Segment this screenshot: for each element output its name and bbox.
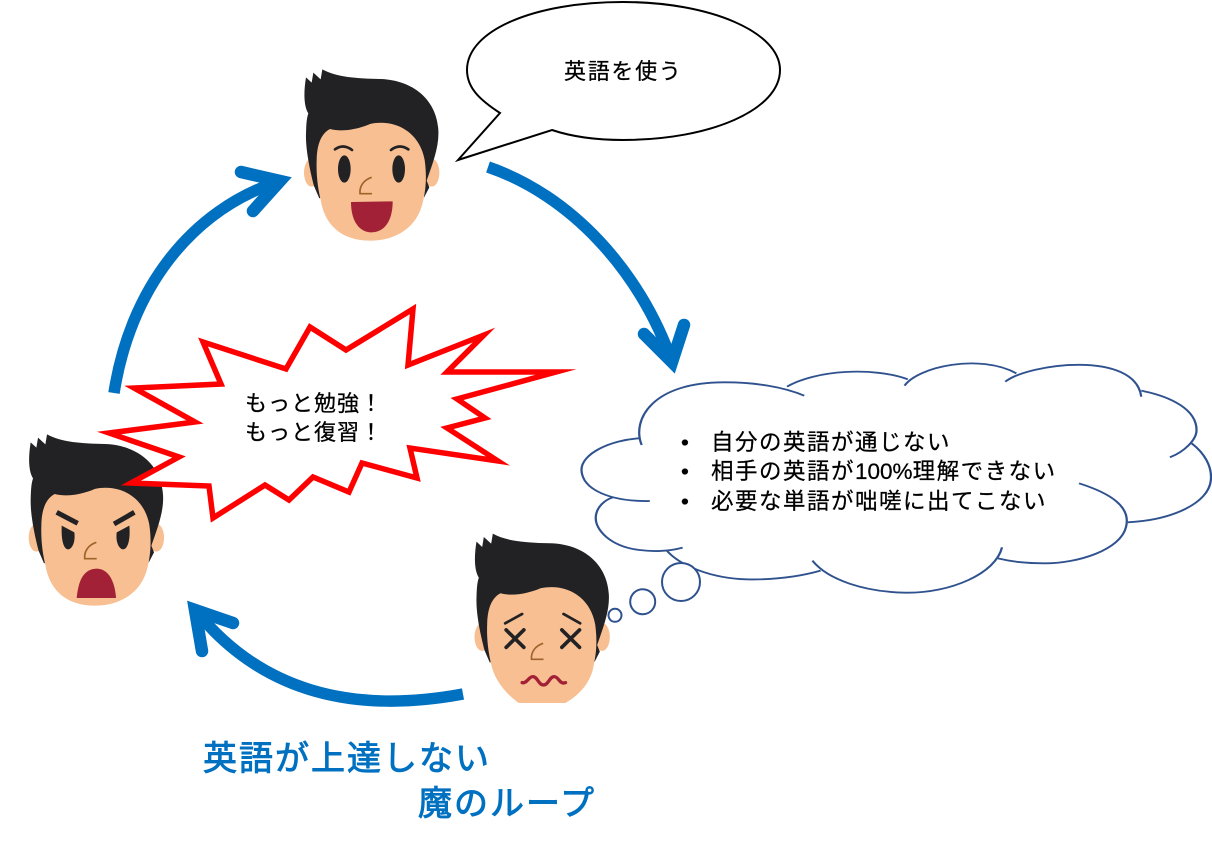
loop title xyxy=(203,740,596,823)
arrow: frustrated to speaking xyxy=(114,172,280,393)
problem list xyxy=(681,430,1057,514)
thought bubbles xyxy=(608,563,700,622)
problem list: 必要な単語が咄嗟に出てこない xyxy=(711,489,1047,514)
problem list: 相手の英語が100%理解できない xyxy=(711,459,1057,484)
face: confused man with crossed-out eyes xyxy=(474,534,610,703)
arrow: failing to frustrated xyxy=(195,610,463,701)
speech bubble: 英語を使う xyxy=(564,59,683,84)
problem list: • xyxy=(681,489,689,514)
starburst callout: もっと勉強！ xyxy=(245,391,383,416)
starburst callout: もっと復習！ xyxy=(245,420,383,445)
face: angry man xyxy=(29,434,164,606)
problem list: • xyxy=(681,430,689,455)
arrow: speaking to failing xyxy=(488,167,684,362)
problem list: 自分の英語が通じない xyxy=(711,430,951,455)
thought cloud xyxy=(581,363,1211,593)
face: happy speaking man xyxy=(304,69,439,241)
problem list: • xyxy=(681,459,689,484)
speech bubble xyxy=(458,2,780,160)
loop title: 英語が上達しない xyxy=(203,740,491,778)
starburst callout xyxy=(109,309,556,518)
loop title: 魔のループ xyxy=(418,785,596,823)
